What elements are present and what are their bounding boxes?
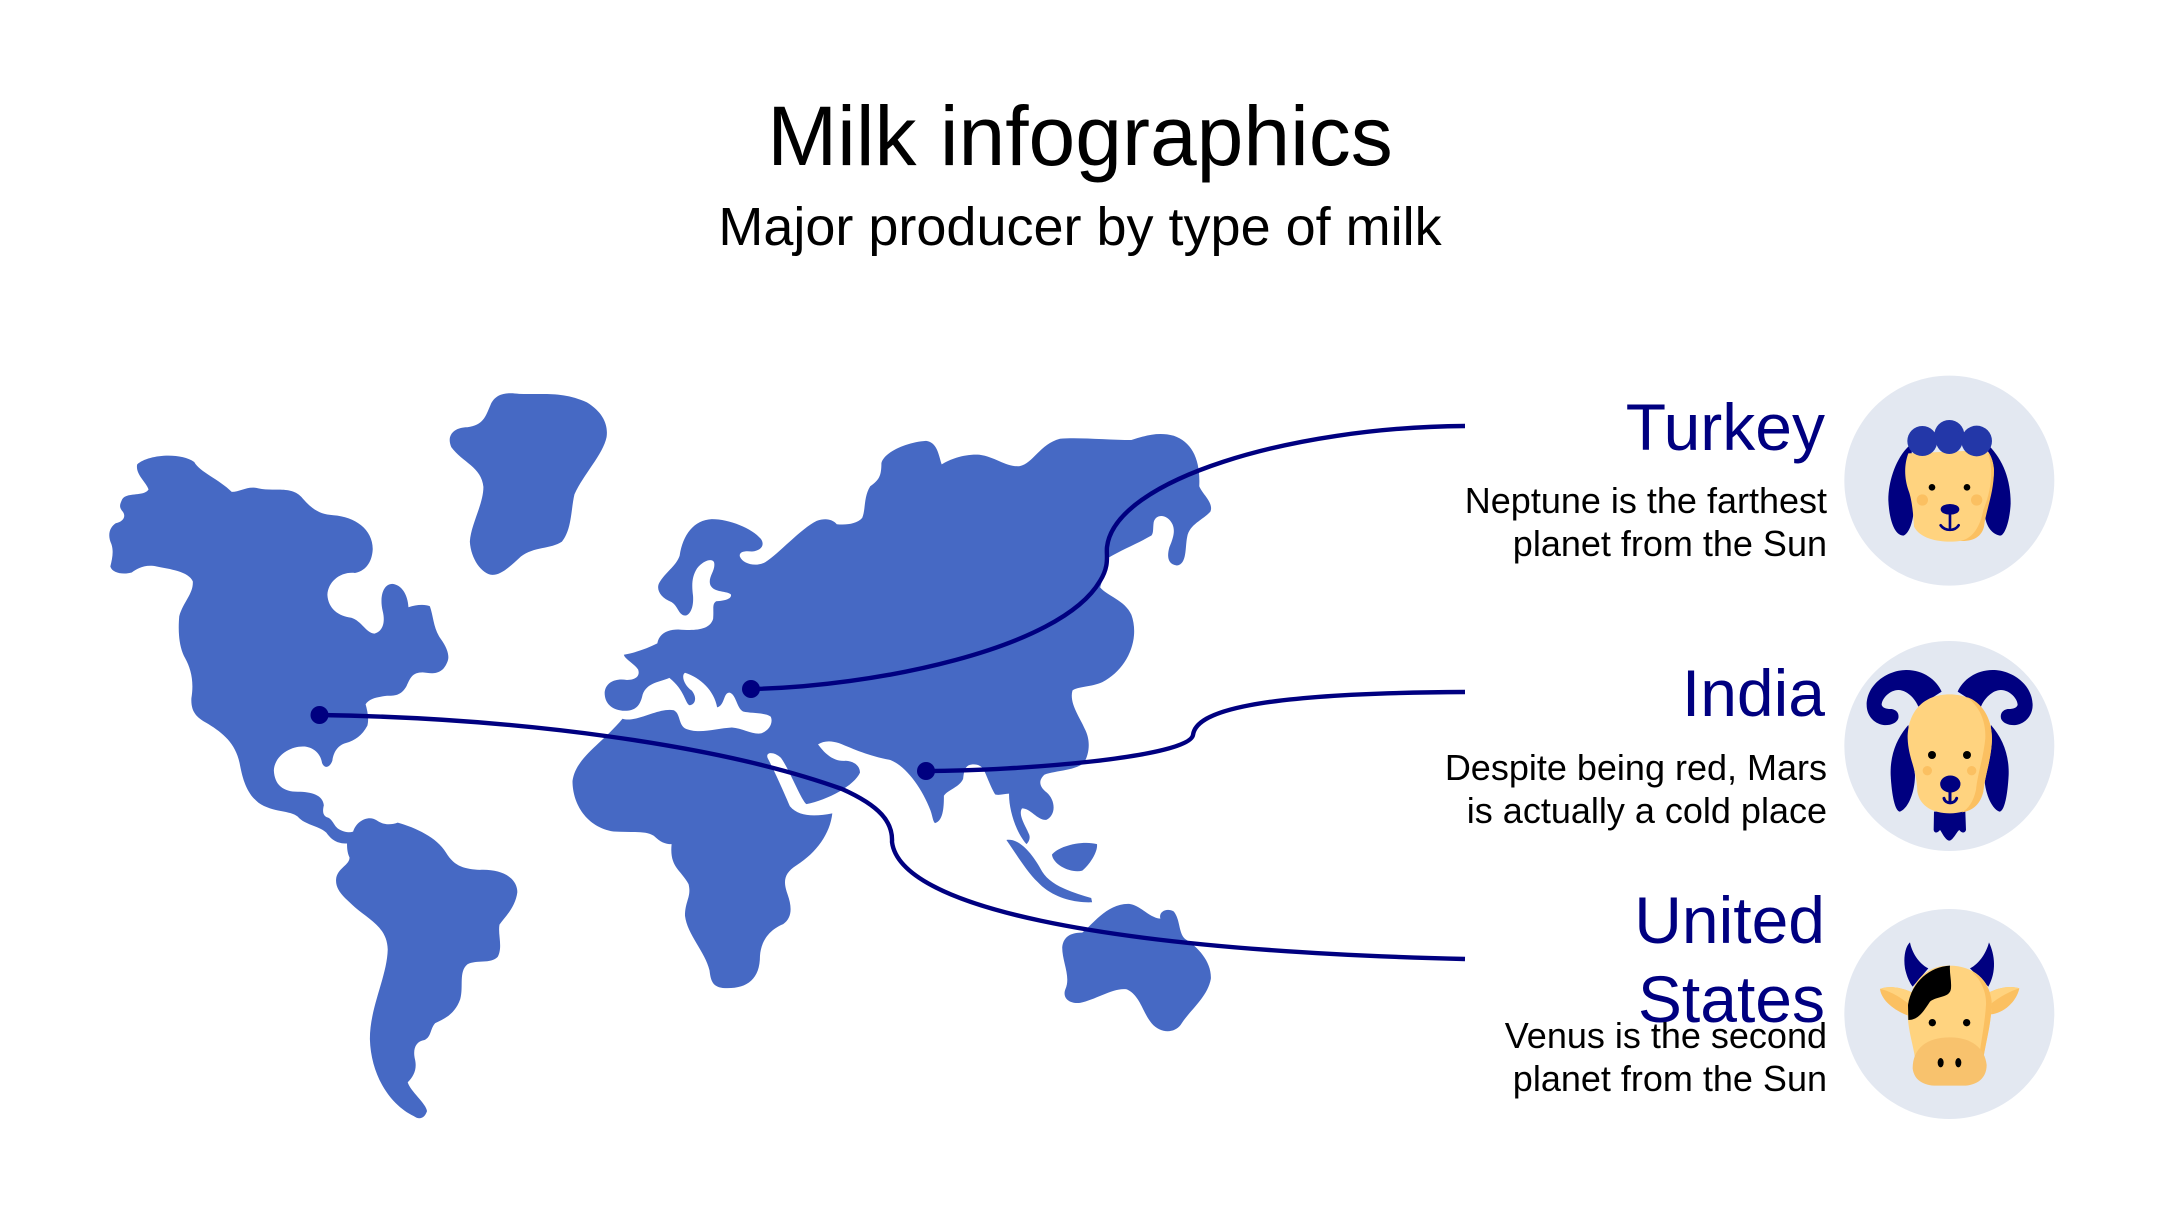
left horn <box>1904 942 1928 987</box>
connector: India <box>917 692 1465 780</box>
right ear <box>1985 445 2011 536</box>
nostrils <box>1938 1058 1961 1067</box>
text: Turkey description: Neptune is the farthest <box>1465 480 1827 521</box>
left ear <box>1880 987 1912 1016</box>
marker: India <box>917 762 935 780</box>
icon background <box>1844 376 2054 586</box>
panel: United States <box>1505 883 2054 1119</box>
icon background <box>1844 909 2054 1119</box>
head shading <box>1972 972 1992 1058</box>
text: India description: Despite being red, Mars <box>1445 747 1827 788</box>
heading: Turkey: Turkey <box>1626 390 1825 464</box>
Indonesia <box>1006 840 1092 902</box>
nose and mouth <box>1941 505 1959 530</box>
left ear <box>1891 725 1915 812</box>
North and South America <box>109 456 517 1118</box>
map: Americas and Greenland <box>109 393 607 1118</box>
head shading <box>1962 697 1992 812</box>
title: Milk infographics <box>767 89 1393 183</box>
connector: Turkey <box>742 426 1465 698</box>
world map <box>109 393 1211 1118</box>
eyes <box>1929 1019 1970 1026</box>
Borneo <box>1052 843 1097 871</box>
nose and mouth <box>1942 777 1959 803</box>
marker: United States <box>310 706 328 724</box>
icon background <box>1844 641 2054 851</box>
Greenland <box>450 393 607 575</box>
head <box>1908 966 1992 1058</box>
head shading <box>1960 453 1994 541</box>
Australia <box>1062 904 1211 1031</box>
right horn <box>1970 942 1994 987</box>
head <box>1905 450 1994 542</box>
map: Eurasia, Africa and Oceania <box>572 434 1211 1031</box>
icon: cow <box>1844 909 2054 1119</box>
heading: India: India <box>1682 656 1825 730</box>
wool <box>1907 420 1992 456</box>
heading: United States: United <box>1634 883 1825 957</box>
right horn <box>1958 670 2033 725</box>
connector: United States <box>310 706 1465 959</box>
Eurasia and Africa <box>572 434 1211 988</box>
left ear <box>1888 445 1914 536</box>
black patch <box>1908 966 1951 1020</box>
eyes <box>1928 751 1971 759</box>
connector line: United States <box>320 715 1465 959</box>
cheeks <box>1923 766 1976 775</box>
panel: India <box>1445 641 2054 851</box>
icon: goat <box>1844 641 2054 851</box>
right ear <box>1989 987 2019 1014</box>
right ear <box>1984 725 2009 812</box>
text: India description: is actually a cold place <box>1467 790 1827 831</box>
connector line: Turkey <box>751 426 1465 689</box>
connector line: India <box>926 692 1465 771</box>
heading: United States: States <box>1638 962 1825 1036</box>
text: Turkey description: planet from the Sun <box>1513 523 1827 564</box>
text: United States description: Venus is the second <box>1505 1015 1827 1056</box>
subtitle: Major producer by type of milk <box>718 197 1443 257</box>
head <box>1908 694 1992 813</box>
beard <box>1934 812 1966 841</box>
text: United States description: planet from the Sun <box>1513 1058 1827 1099</box>
left horn <box>1867 670 1942 725</box>
icon: sheep <box>1844 376 2054 586</box>
panel: Turkey <box>1465 376 2054 586</box>
eyes <box>1929 484 1970 491</box>
muzzle <box>1913 1037 1987 1086</box>
marker: Turkey <box>742 680 760 698</box>
cheeks <box>1917 494 1982 506</box>
